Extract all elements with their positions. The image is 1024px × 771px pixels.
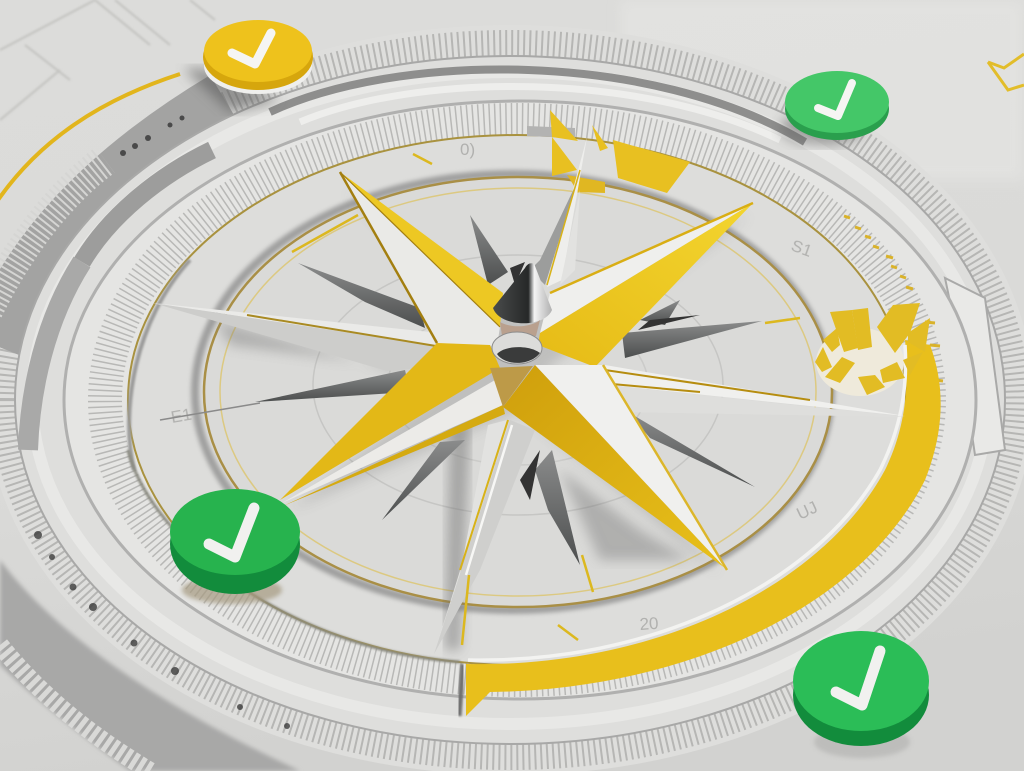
dial degree labels: E1 (169, 405, 193, 427)
yellow progress arc (466, 340, 941, 716)
scale holes lower left (34, 531, 290, 729)
dark secondary blades (160, 215, 762, 565)
dial degree labels: 20 (639, 614, 659, 634)
dial degree labels: S1 (789, 236, 815, 261)
dark scale sector at upper left (0, 100, 225, 345)
centre bronze wedge (490, 366, 533, 407)
NW point: white and yellow facets (340, 172, 503, 346)
icon: check mark (209, 508, 254, 557)
centre metal pin (492, 263, 552, 364)
dial degree labels: UJ (794, 498, 821, 524)
scale holes upper left (120, 116, 184, 156)
dial degree labels: 0) (460, 140, 475, 159)
token: green check bottom right (793, 631, 929, 758)
dial plate (128, 135, 906, 665)
silver inner arc edge (468, 345, 906, 660)
north point (530, 137, 587, 287)
inner tick ring (64, 101, 976, 699)
token: green check left (170, 489, 300, 604)
SW point: yellow and white facets (280, 343, 505, 506)
icon: check mark (818, 83, 852, 116)
compass star (153, 137, 905, 654)
token: yellow check (185, 20, 313, 112)
icon: check mark (836, 651, 880, 705)
SE point: white and yellow facets (503, 365, 727, 570)
dark band lower left (0, 560, 300, 771)
gold arc outer (0, 74, 180, 200)
west point (153, 303, 436, 371)
token: green check top right (780, 71, 889, 146)
east point (600, 365, 905, 417)
icon: check mark (232, 33, 271, 64)
broken yellow medallion (815, 303, 930, 396)
shadow under star (215, 190, 750, 650)
white tick band lower left (0, 645, 150, 771)
broken yellow patch at top (527, 110, 690, 193)
dark strip beside arc end (459, 664, 463, 716)
south point (434, 420, 535, 654)
dial degree labels (169, 140, 821, 634)
gold scale marks on right (844, 216, 943, 381)
NE point: white and yellow facets (538, 203, 753, 367)
gold ticks on the dial (292, 154, 800, 645)
